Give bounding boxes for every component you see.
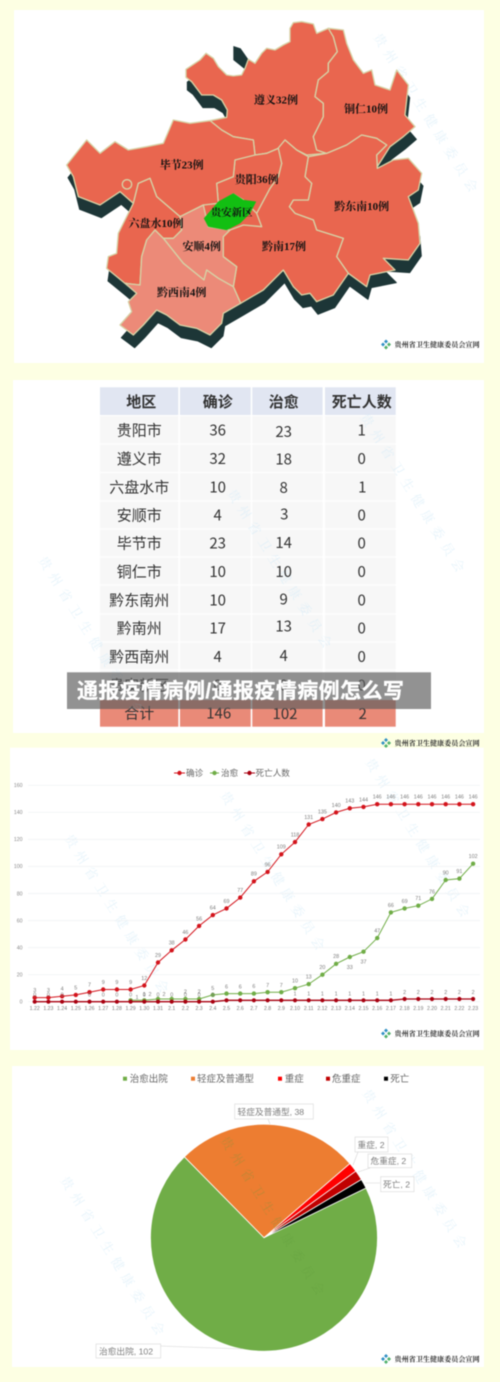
watermark: 贵州省卫生健康委员会	[35, 554, 149, 723]
table column: cured: 10	[275, 561, 292, 582]
pie legend	[123, 1073, 409, 1085]
table column: deaths: 0	[358, 561, 366, 582]
watermark: 贵州省卫生健康委员会	[224, 487, 338, 656]
data labels: deaths: 0	[198, 992, 201, 998]
data labels: deaths: 0	[61, 992, 64, 998]
x axis labels: 1.25	[71, 1006, 81, 1012]
data labels: cured: 1	[136, 995, 138, 1001]
data labels: cured: 2	[148, 992, 152, 998]
data labels: cured: 37	[360, 960, 366, 966]
callout: cured	[96, 1344, 161, 1358]
y axis labels: 80	[17, 891, 23, 897]
table column: deaths: 0	[358, 618, 366, 638]
data labels: cured: 47	[374, 928, 380, 934]
pie legend: 轻症及普通型	[197, 1073, 255, 1085]
table column: deaths: 0	[358, 532, 366, 554]
table column: cured: 4	[280, 645, 288, 666]
x axis labels: 2.6	[237, 1006, 244, 1012]
data labels: deaths: 0	[102, 992, 105, 998]
data labels: deaths: 2	[444, 990, 447, 996]
x axis labels: 1.27	[98, 1006, 108, 1012]
data labels: confirmed: 29	[155, 953, 161, 959]
panel: pie chart	[12, 1066, 484, 1367]
data labels: deaths: 0	[143, 992, 146, 998]
y axis labels: 120	[14, 837, 23, 843]
table column: region: 遵义市	[117, 450, 162, 468]
map labels: 黔东南10例	[334, 199, 389, 213]
table column: confirmed: 146	[206, 702, 231, 724]
table column: confirmed: 23	[209, 532, 226, 554]
data labels: deaths: 1	[307, 992, 310, 998]
x axis labels: 2.9	[278, 1006, 285, 1012]
data labels: deaths: 1	[376, 992, 379, 998]
callout: mild: 轻症及普通型, 38	[238, 1106, 304, 1117]
icon: logo	[381, 1354, 391, 1364]
table header	[126, 393, 392, 411]
data labels: deaths: 0	[170, 992, 173, 998]
map labels: 遵义32例	[254, 92, 298, 106]
table column: region	[109, 422, 169, 722]
x axis labels: 2.3	[195, 1006, 203, 1012]
y axis labels: 160	[14, 783, 23, 789]
x axis labels: 2.11	[304, 1006, 314, 1012]
map labels: 黔西南4例	[157, 285, 206, 299]
data labels: deaths: 1	[335, 992, 338, 998]
slice: deaths	[264, 1180, 366, 1238]
region: Qiannan	[223, 140, 348, 303]
data labels: confirmed: 46	[182, 930, 188, 936]
data labels: confirmed: 64	[210, 906, 216, 912]
callout: deaths: 死亡, 2	[383, 1178, 410, 1190]
watermark	[61, 756, 476, 1001]
table column: cured	[273, 421, 297, 724]
panel: line chart	[10, 748, 484, 1050]
chart legend: 死亡人数	[256, 767, 290, 778]
data labels: confirmed: 146	[414, 795, 423, 801]
table column: confirmed: 4	[214, 504, 222, 526]
x axis labels: 1.22	[30, 1006, 40, 1012]
data labels: confirmed: 144	[359, 797, 368, 803]
data labels: cured: 6	[252, 984, 255, 990]
y axis labels	[14, 783, 23, 1006]
callout: critical	[368, 1154, 412, 1168]
data labels: cured: 10	[292, 979, 298, 985]
data labels: confirmed: 7	[88, 983, 91, 989]
map labels: 毕节23例	[160, 158, 204, 172]
chart legend: 确诊	[186, 767, 204, 778]
x axis labels: 2.5	[223, 1006, 230, 1012]
map north notch side	[233, 46, 248, 69]
x axis labels: 1.23	[43, 1006, 54, 1012]
table column: region: 贵阳市	[117, 422, 162, 440]
table column: cured: 8	[280, 477, 288, 498]
data labels: cured: 90	[443, 870, 449, 876]
table column: cured: 18	[275, 448, 292, 470]
table column: region: 黔东南州	[109, 592, 169, 610]
x axis labels: 2.20	[427, 1006, 437, 1012]
data labels: confirmed: 3	[47, 988, 50, 994]
x axis labels: 1.26	[84, 1006, 95, 1012]
map top surface base	[67, 22, 422, 335]
data labels: confirmed: 146	[455, 795, 464, 801]
data labels: confirmed: 146	[428, 795, 436, 801]
x axis labels: 2.1	[168, 1006, 175, 1012]
data labels: deaths: 1	[321, 992, 324, 998]
data labels: confirmed: 118	[291, 832, 299, 838]
x axis labels: 1.28	[112, 1006, 122, 1012]
y axis labels: 100	[14, 864, 23, 870]
y axis labels: 140	[14, 810, 23, 816]
map labels: 六盘水10例	[128, 216, 184, 230]
x axis labels: 2.19	[413, 1006, 423, 1012]
x axis labels: 2.7	[250, 1006, 258, 1012]
y axis labels: 40	[17, 945, 23, 951]
data labels: confirmed: 146	[386, 795, 395, 801]
data labels: cured: 13	[306, 974, 312, 980]
table column: region: 毕节市	[117, 536, 162, 552]
x axis labels: 2.18	[400, 1006, 410, 1012]
source credit: 贵州省卫生健康委员会宣网	[394, 1029, 480, 1038]
data labels: cured: 2	[198, 990, 201, 996]
source credit: 贵州省卫生健康委员会宣网	[394, 340, 480, 349]
table column: deaths: 0	[358, 674, 366, 696]
table column: confirmed: 0	[214, 674, 222, 696]
data labels: cured: 71	[415, 896, 421, 902]
data labels: cured: 1	[143, 992, 146, 998]
data labels: cured: 102	[469, 854, 478, 860]
x axis labels: 1.29	[126, 1006, 136, 1012]
data labels: deaths: 0	[184, 992, 187, 998]
data labels: deaths: 1	[294, 992, 296, 998]
region: Tongren	[313, 28, 415, 167]
table header: 确诊	[203, 393, 233, 411]
table column: confirmed: 36	[209, 420, 226, 440]
watermark over pie: 贵州省卫生健康委员会	[217, 1134, 331, 1303]
table column: deaths: 1	[358, 420, 366, 440]
x axis labels: 1.24	[57, 1006, 67, 1012]
pie leader lines	[161, 1119, 380, 1349]
data labels: deaths: 1	[348, 992, 351, 998]
data labels: deaths: 1	[389, 992, 392, 998]
map labels: 安顺4例	[182, 239, 221, 253]
table column: region: 铜仁市	[117, 564, 162, 581]
watermark: 贵州省卫生健康委员会	[57, 1174, 171, 1343]
y axis labels: 20	[17, 972, 23, 978]
chart legend	[174, 767, 290, 778]
data labels: cured: 2	[162, 992, 166, 998]
data labels: cured	[136, 854, 478, 1001]
data labels: deaths: 2	[417, 990, 420, 996]
pie chart	[150, 1124, 377, 1351]
data labels: cured: 5	[211, 986, 214, 992]
table column: deaths: 1	[358, 476, 366, 498]
y axis labels: 60	[17, 918, 23, 924]
source credit: 贵州省卫生健康委员会宣网	[394, 1354, 480, 1364]
x axis labels: 2.22	[454, 1006, 465, 1012]
x axis labels: 1.31	[153, 1006, 163, 1012]
region: Qiandongnan	[289, 135, 422, 287]
data labels: deaths: 2	[472, 990, 475, 996]
table column: confirmed: 10	[209, 590, 226, 610]
x axis labels: 2.14	[345, 1006, 355, 1012]
region: Liupanshui	[107, 178, 182, 285]
data labels: deaths: 0	[156, 992, 160, 998]
data labels: confirmed: 38	[169, 941, 175, 947]
data labels: cured: 20	[319, 965, 325, 971]
data labels: confirmed: 143	[345, 799, 354, 805]
table column: cured: 9	[280, 588, 288, 610]
title banner	[67, 672, 431, 709]
table column: cured: 14	[275, 532, 292, 553]
table column: region: 黔南州	[117, 620, 162, 638]
x axis labels: 2.8	[264, 1006, 271, 1012]
data labels: cured: 7	[280, 983, 283, 989]
x axis labels	[30, 1006, 478, 1012]
table column: confirmed	[206, 420, 231, 724]
callout: severe	[355, 1137, 388, 1152]
data labels: confirmed: 131	[304, 815, 313, 821]
data labels: confirmed: 9	[115, 980, 118, 986]
pie legend: 危重症	[332, 1073, 361, 1085]
watermark: 贵州省卫生健康委员会	[357, 411, 471, 580]
data labels: confirmed: 96	[265, 862, 271, 868]
watermark: 贵州省卫生健康委员会	[61, 832, 175, 1001]
title banner: 通报疫情病例/通报疫情病例怎么写	[77, 680, 404, 703]
data labels: confirmed: 140	[332, 803, 341, 809]
data labels: confirmed: 109	[277, 845, 286, 851]
pie legend: 重症	[285, 1073, 304, 1085]
data labels: deaths: 0	[33, 992, 36, 998]
watermark	[57, 1087, 473, 1343]
map extruded side	[68, 34, 423, 348]
slice: mild	[184, 1124, 350, 1238]
watermark: 贵州省卫生健康委员会	[362, 756, 476, 925]
table column: cured: 3	[280, 504, 288, 524]
data labels: confirmed: 146	[373, 795, 382, 801]
y axis labels: 0	[20, 1000, 23, 1006]
slice: cured	[150, 1157, 377, 1351]
data labels: confirmed: 77	[237, 888, 243, 894]
pie legend: 死亡	[390, 1073, 409, 1085]
table column: confirmed: 32	[209, 448, 226, 469]
data labels: confirmed: 69	[224, 899, 230, 905]
table column: deaths: 0	[358, 448, 366, 469]
data labels: cured: 28	[333, 954, 339, 960]
icon: logo	[381, 340, 391, 350]
data labels: cured: 33	[347, 965, 353, 971]
table column: region: 黔西南州	[109, 649, 169, 666]
data labels: cured: 66	[388, 903, 394, 909]
table column: cured: 13	[275, 616, 292, 636]
table column: deaths: 0	[358, 590, 366, 610]
watermark: 贵州省卫生健康委员会	[217, 789, 331, 958]
x axis labels: 2.17	[386, 1006, 396, 1012]
x axis labels: 2.23	[468, 1006, 478, 1012]
data labels: confirmed: 5	[74, 985, 77, 991]
map labels: 贵阳36例	[235, 172, 279, 186]
data labels: deaths: 2	[430, 990, 434, 996]
data labels: deaths: 2	[458, 990, 461, 996]
line: deaths	[35, 999, 473, 1002]
data labels: confirmed: 146	[441, 795, 450, 801]
data labels: deaths: 0	[47, 992, 50, 998]
data labels: confirmed: 89	[251, 872, 257, 878]
icon: logo	[381, 1028, 391, 1038]
region: Guiyang	[217, 148, 282, 213]
map labels: 贵安新区	[211, 206, 253, 219]
table column: deaths: 0	[358, 646, 366, 667]
icon: logo	[381, 738, 391, 748]
source credit: 贵州省卫生健康委员会宣网	[394, 738, 480, 748]
callout: cured: 治愈出院, 102	[99, 1345, 153, 1356]
table column: region: 六盘水市	[109, 478, 169, 496]
map labels	[128, 92, 389, 299]
panel: data table	[13, 380, 484, 733]
table column: region: 贵安新区	[109, 678, 169, 694]
line: cured	[131, 864, 473, 1000]
data labels: deaths: 0	[211, 992, 214, 998]
table cell backgrounds	[100, 387, 396, 727]
x axis labels: 2.16	[372, 1006, 382, 1012]
line: confirmed	[35, 804, 473, 998]
region: Zunyi	[186, 22, 337, 155]
x axis labels: 2.15	[358, 1006, 369, 1012]
table column: region: 合计	[124, 706, 154, 722]
table header: 治愈	[269, 393, 299, 411]
data labels: confirmed: 9	[102, 980, 105, 986]
callout: critical: 危重症, 2	[370, 1155, 406, 1166]
callout: deaths	[381, 1177, 414, 1192]
data labels: cured: 2	[184, 990, 187, 996]
table column: confirmed: 17	[209, 618, 226, 638]
data labels: confirmed: 4	[61, 987, 64, 993]
data labels: deaths	[33, 990, 475, 998]
data labels: deaths: 2	[403, 990, 406, 996]
table header: 地区	[126, 394, 156, 411]
slice: severe	[264, 1164, 356, 1238]
map of Guizhou	[67, 22, 423, 348]
panel: province map	[14, 10, 484, 363]
data labels: confirmed: 56	[196, 916, 202, 922]
x axis labels: 2.2	[182, 1006, 189, 1012]
watermark: 贵州省卫生健康委员会	[370, 31, 484, 200]
table column: confirmed: 4	[214, 646, 222, 667]
data labels: cured: 6	[225, 985, 228, 991]
table column: deaths: 0	[358, 504, 366, 526]
table column: deaths: 2	[359, 703, 367, 724]
data labels: deaths: 0	[129, 992, 132, 998]
data labels: cured: 7	[266, 983, 269, 989]
map regions	[67, 22, 422, 335]
region: Bijie	[67, 120, 255, 217]
table column: deaths	[358, 420, 367, 724]
x axis labels: 2.21	[441, 1006, 451, 1012]
region: Anshun	[163, 205, 237, 287]
table column: confirmed: 10	[209, 561, 226, 582]
x axis labels: 2.13	[331, 1006, 341, 1012]
chart legend: 治愈	[221, 767, 239, 778]
table column: region: 安顺市	[117, 508, 162, 524]
data labels: deaths: 0	[88, 992, 91, 998]
data labels: deaths: 0	[115, 992, 118, 998]
region: Qianxinan	[120, 230, 241, 335]
pie legend: 治愈出院	[130, 1073, 168, 1085]
x axis labels: 2.4	[209, 1006, 217, 1012]
data labels: confirmed: 146	[469, 795, 478, 801]
region: Guian New Area	[204, 193, 256, 230]
data labels: confirmed: 135	[318, 810, 327, 816]
data labels: confirmed: 3	[33, 988, 36, 994]
map labels: 黔南17例	[262, 239, 306, 253]
watermark: 贵州省卫生健康委员会	[359, 1087, 473, 1256]
table column: cured: 102	[273, 703, 297, 724]
table column: cured: 0	[280, 674, 288, 696]
data labels: confirmed: 9	[129, 980, 132, 986]
data labels: confirmed: 146	[400, 795, 409, 801]
data labels: deaths: 1	[362, 992, 365, 998]
table column: confirmed: 10	[209, 476, 226, 498]
slice: critical	[264, 1171, 361, 1238]
data labels: confirmed: 12	[141, 976, 147, 982]
x axis labels: 2.10	[290, 1006, 300, 1012]
table header: 死亡人数	[332, 393, 392, 411]
data labels: cured: 76	[429, 889, 435, 895]
region: small ring	[122, 180, 132, 189]
data labels: cured: 6	[239, 985, 242, 991]
x axis labels: 2.12	[317, 1006, 328, 1012]
callout: mild	[235, 1104, 313, 1119]
map labels: 铜仁10例	[344, 102, 388, 116]
data labels: cured: 69	[402, 899, 408, 905]
table column: cured: 23	[275, 421, 292, 442]
x axis labels: 1.30	[139, 1006, 149, 1012]
watermark	[35, 411, 471, 723]
callout: severe: 重症, 2	[358, 1139, 385, 1150]
data labels: confirmed	[33, 795, 478, 994]
data labels: cured: 91	[456, 869, 462, 875]
